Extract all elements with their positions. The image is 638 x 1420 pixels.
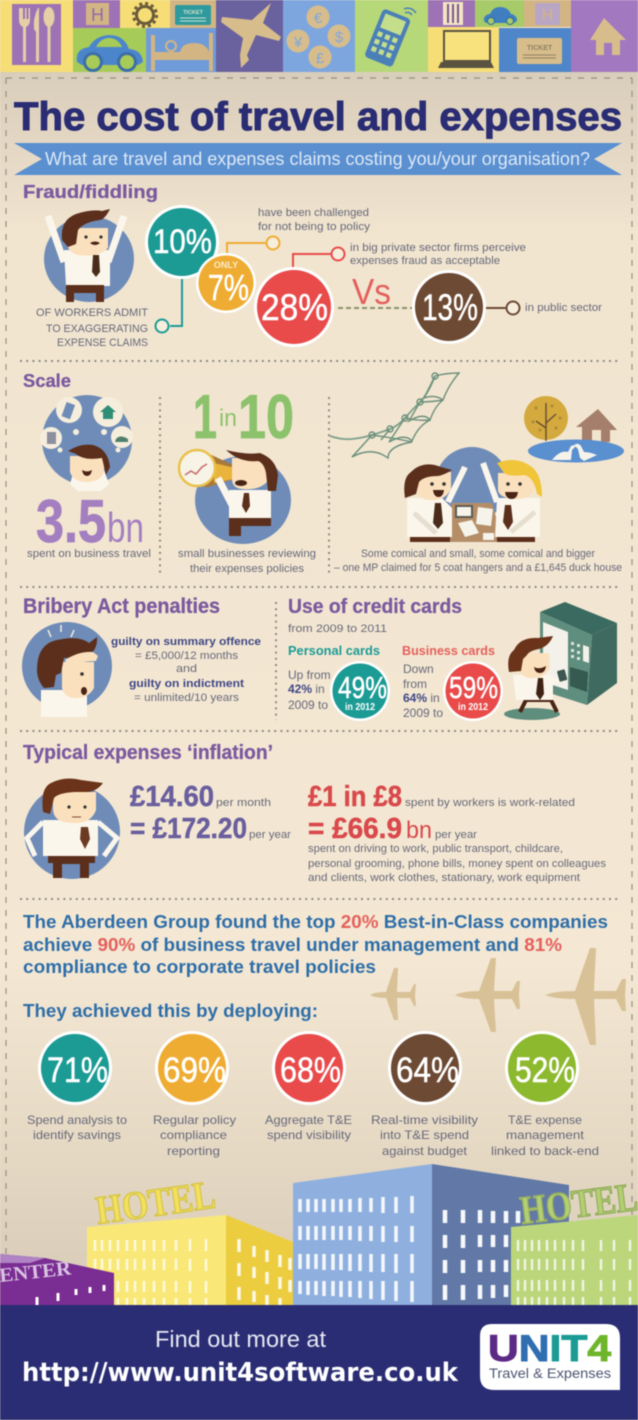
caption: private sector: expenses fraud as acceptable [350,255,500,267]
deployment captions: linked to back-end [491,1144,599,1158]
building: green hotel [511,1215,638,1305]
stat: 71% [38,1031,112,1105]
deployment captions: into T&E spend [380,1128,469,1142]
penalties text: = £5,000/12 months [135,650,239,662]
date range: from 2009 to 2011 [288,623,387,635]
illustration: city skyline [0,1164,638,1305]
deployment captions: against budget [382,1144,468,1158]
stat: 13%: 13% [422,287,478,328]
deployment captions: Aggregate T&E [265,1113,352,1127]
stat: 1 in 10: 10 [238,383,294,452]
caption: reviewing policies [178,548,316,575]
stat: 28%: 28% [261,287,328,328]
aberdeen group statement: compliance to corporate travel policies [23,957,376,977]
business cards note: from [403,677,427,691]
icon: coins: ¥ [293,34,303,51]
icon: ticket: TICKET [183,10,204,16]
stat: only 7%: ONLY [214,260,238,270]
character: cheering man [44,209,134,302]
stat: 28% [254,267,334,347]
icon: laptop [438,31,494,68]
penalties text [111,636,261,704]
expense list [308,843,607,884]
icon: hotel sign: H [91,5,104,25]
stat: 59% [443,661,503,721]
caption: reviewing policies: their expenses policies [190,563,304,575]
stat: 3.5bn: 3.5 [36,488,106,555]
character: shrugging man [24,779,120,879]
icon: ticket 2 [517,38,562,64]
logo: unit4 travel and expenses: UNIT4 [488,1328,611,1369]
business cards note: Down [403,662,434,676]
stat: 52%: 52% [515,1051,575,1090]
heading: Typical expenses ‘inflation’ [23,742,273,764]
stat: £66.9bn: per year [435,829,477,841]
personal cards label: Personal cards [288,644,380,658]
caption: challenged: for not being to policy [258,221,371,233]
aberdeen group statement: achieve 90% of business travel under management and 81% [23,935,562,955]
character: dreaming man [40,395,133,491]
stat: £66.9bn: = £66.9 [308,813,402,845]
penalties text: = unlimited/10 years [134,692,240,704]
stat: 49%: in 2012 [345,702,375,713]
stat: £1 in £8 [308,781,575,813]
stat: only 7% [196,253,256,313]
icon: cutlery [12,4,61,65]
logo: unit4 travel and expenses [480,1324,620,1390]
deployment captions: Spend analysis to [27,1113,127,1127]
building: blue tower [293,1164,569,1305]
icon: car [77,35,143,70]
dashed link [338,307,412,309]
illustration: two men at table [404,447,542,542]
icon: bed [151,33,213,71]
caption: public sector: in public sector [525,302,602,314]
deployment captions: compliance [160,1128,227,1142]
heading: Fraud/fiddling [23,182,158,202]
heading: Scale [23,371,71,391]
icon: hotel sign [86,3,109,25]
stat: £66.9bn [308,813,477,845]
stat: 10% [145,205,219,279]
stat: £172.20 per year: per year [249,829,291,841]
heading: Use of credit cards [288,596,462,618]
icon: small car [484,7,517,24]
penalties text: and [176,663,197,675]
stat: £1 in £8: spent by workers is work-related [405,797,575,809]
icon: plane [221,3,281,68]
caption: workers: TO EXAGGERATING [46,323,148,335]
stat: £66.9bn: bn [406,817,432,844]
stat: 64% [388,1031,462,1105]
stat: 59%: 59% [449,670,498,705]
caption: duck house claim: – one MP claimed for 5 coat hangers and a £1,645 duck house [334,562,622,574]
deployment captions: Regular policy [153,1113,236,1127]
caption: challenged: have been challenged [258,207,369,219]
stat: 3.5bn: bn [107,504,144,551]
call to action: Find out more at [155,1326,327,1352]
aberdeen group statement [23,912,608,977]
business cards note: 2009 to [403,706,443,720]
personal cards note: 2009 to [288,698,328,712]
business cards label: Business cards [402,644,495,658]
caption: workers: EXPENSE CLAIMS [57,337,148,349]
building: purple centre [0,1254,114,1305]
section: use of credit cards [288,596,617,721]
deployment captions: identify savings [33,1128,121,1142]
title: The cost of travel and expenses [14,95,622,139]
versus: Vs [352,271,391,312]
character: man at cash machine [504,636,567,720]
caption: workers [36,307,148,349]
icon: gear [134,4,156,26]
character: worried man [22,622,112,717]
penalties text: guilty on summary offence [111,636,261,648]
icon: ticket 2: TICKET [527,45,553,52]
sign: hotel yellow: HOTEL [93,1172,218,1233]
personal cards note: Up from [288,668,331,682]
deployment captions: spend visibility [267,1128,351,1142]
subtitle ribbon [14,143,622,175]
connector lines [156,236,520,332]
footer band [0,1305,638,1420]
stat: 1 in 10: in [219,405,237,432]
stat: 71%: 71% [47,1051,108,1090]
stat: 1 in 10: 1 [193,383,217,452]
stat: 13% [412,270,486,344]
icon: right hotel sign: H [542,7,553,24]
stat: 49% [330,661,390,721]
icon: coins: € [314,10,323,27]
character: man with telescope [179,450,291,544]
section: typical expenses inflation [23,742,607,884]
illustration: duck house [524,396,624,462]
section: fraud/fiddling [23,182,602,349]
deployment captions: Real-time visibility [371,1113,478,1127]
stat: 69% [155,1031,229,1105]
stat: £172.20 per year: = £172.20 [130,813,247,845]
website url: http://www.unit4software.co.uk [22,1358,459,1388]
caption: duck house claim: Some comical and small, some comical and bigger [361,548,595,560]
business cards note: 64% [403,691,427,705]
icon: right cutlery [443,2,463,25]
stat: only 7%: 7% [208,267,249,308]
stat: £1 in £8: £1 in £8 [308,781,402,813]
illustration: coat hangers [330,373,459,458]
stat: 52% [505,1031,579,1105]
expense list: spent on driving to work, public transport, childcare, [308,843,563,855]
icon: house [590,18,626,55]
deployment captions: management [506,1128,585,1142]
stat: 68%: 68% [280,1051,341,1090]
building: purple centre: ENTER [0,1258,73,1287]
caption: reviewing policies: small businesses reviewing [178,548,316,560]
stat: 49%: 49% [338,670,387,705]
heading: deploying: They achieved this by deploying: [23,1001,318,1021]
section: bribery act penalties [22,595,261,717]
caption: business travel: spent on business travel [27,548,151,560]
subtitle ribbon: What are travel and expenses claims costing you/your organisation? [45,149,590,169]
stat: 1 in 10 [193,383,294,452]
icon: coins: £ [316,50,325,67]
stat: 10%: 10% [153,223,212,261]
stat: 68% [272,1031,346,1105]
icon: mobile phone [364,8,416,68]
icon: coins [286,6,350,68]
expense list: personal grooming, phone bills, money spent on colleagues [308,858,607,870]
stat: 59%: in 2012 [458,702,488,713]
caption: workers: OF WORKERS ADMIT [36,307,148,319]
logo: unit4 travel and expenses: Travel & Expenses [489,1365,611,1381]
stat: £14.60 per month: per month [216,797,271,809]
icon: three planes [370,948,626,1045]
deployment captions [27,1113,599,1158]
icon: right hotel sign [535,3,560,25]
stat: £14.60 per month [130,781,271,813]
icon: ticket [175,5,211,25]
stat: 64%: 64% [396,1051,459,1090]
stat: 69%: 69% [163,1051,226,1090]
top icon banner [0,0,638,72]
section: scale [23,371,624,575]
caption: duck house claim [334,548,622,574]
expense list: and clients, work clothes, stationary, work equipment [308,872,580,884]
personal cards note: in [312,682,325,696]
business cards note: in [427,691,440,705]
heading: Bribery Act penalties [23,595,220,618]
penalties text: guilty on indictment [129,678,244,690]
personal cards note: 42% [288,682,312,696]
deployment captions: reporting [167,1144,220,1158]
building: yellow hotel [87,1215,293,1305]
stat: £14.60 per month: £14.60 [130,781,214,813]
aberdeen group statement: The Aberdeen Group found the top 20% Best-in-Class companies [23,912,608,932]
caption: private sector: in big private sector firms perceive [350,242,526,254]
icon: coins: $ [335,29,344,46]
illustration: cash machine [540,602,617,705]
stat row: deployment percentages [38,1031,579,1105]
deployment captions: T&E expense [508,1113,582,1127]
